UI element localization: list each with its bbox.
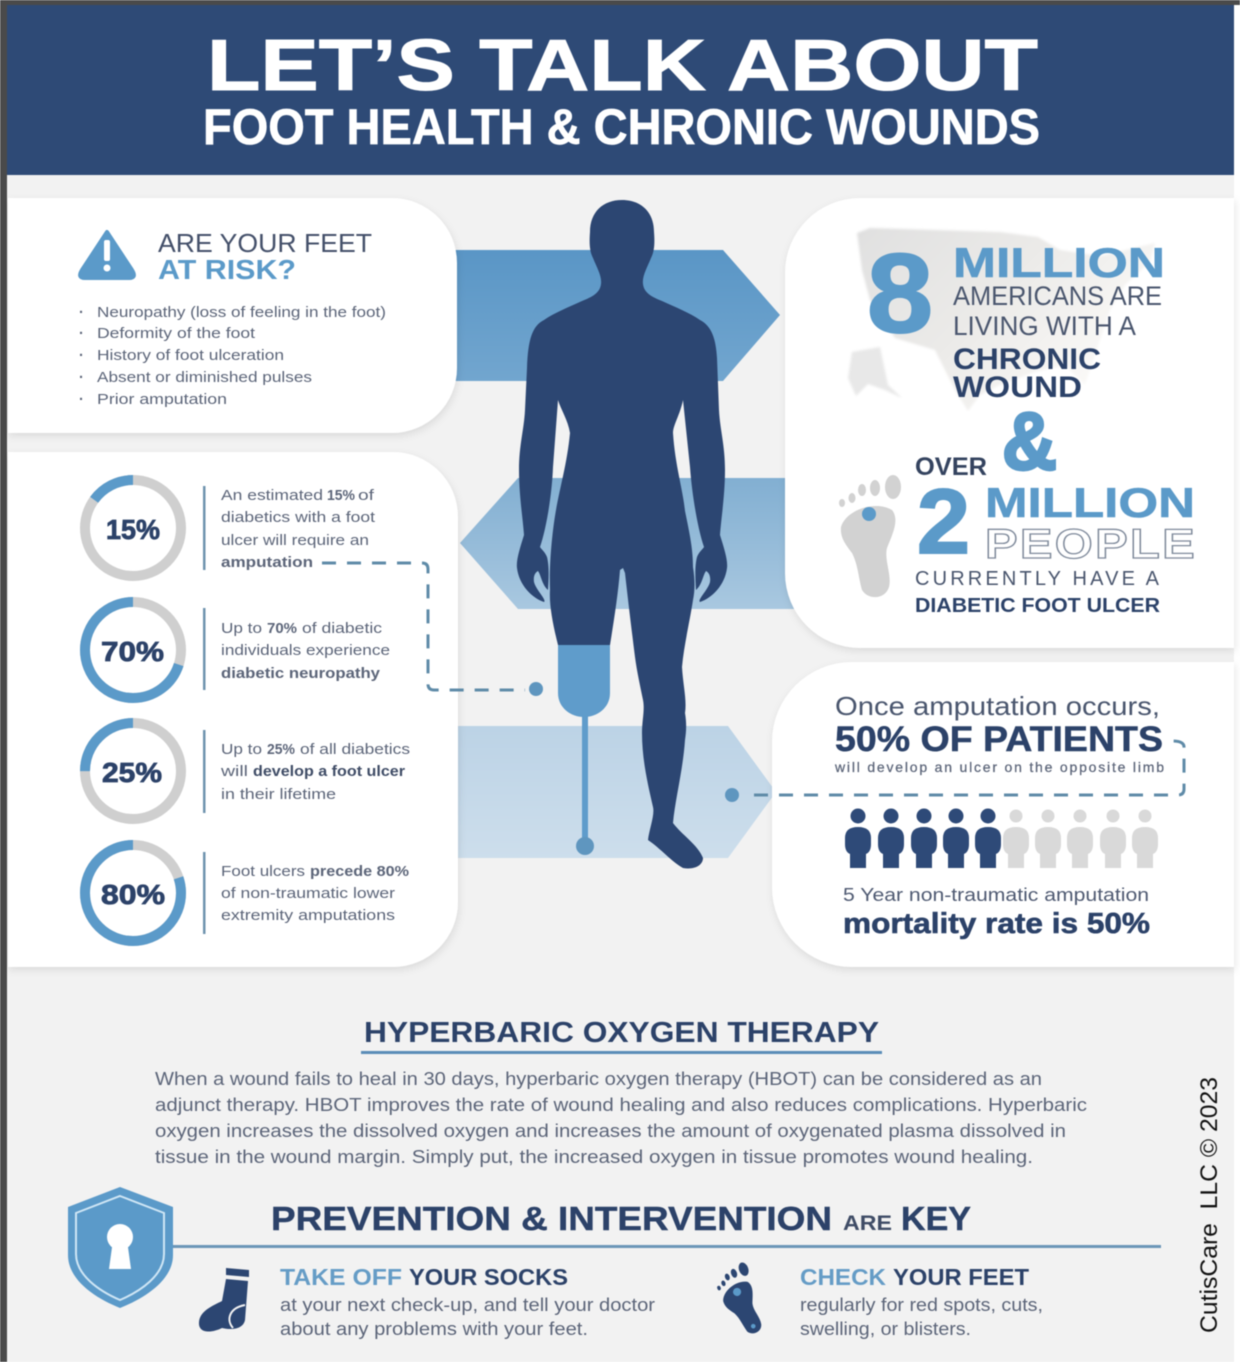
risk factor list: · (79, 326, 84, 342)
text: 15% amputation: 15% (327, 488, 355, 504)
text: 25% foot ulcer: of all diabetics (300, 742, 410, 758)
stat: 8 million: AMERICANS ARE (953, 281, 1162, 311)
connector: leg to opposite limb callout (725, 741, 1184, 802)
stat: 8 million (867, 231, 1165, 404)
text: 15% amputation: An estimated (221, 488, 323, 504)
text: once amputation occurs: will develop an ulcer on the opposite limb (834, 759, 1164, 775)
stat: over 2 million people: PEOPLE (985, 520, 1197, 567)
text: 25% foot ulcer (203, 730, 410, 813)
tip: check your feet: regularly for red spots, cuts, (800, 1295, 1043, 1315)
text: once amputation occurs: Once amputation occurs, (835, 691, 1160, 721)
text: 15% amputation (203, 486, 375, 571)
risk factor list: Neuropathy (loss of feeling in the foot) (97, 305, 386, 321)
icon: gray foot with wound (839, 475, 901, 597)
risk factor list: History of foot ulceration (97, 348, 284, 364)
icon: sock (199, 1268, 249, 1332)
paragraph: tissue in the wound margin. Simply put, the increased oxygen in tissue promotes wound healing. (155, 1147, 1033, 1167)
icon: shield with keyhole (68, 1187, 173, 1308)
text: mortality rate (843, 885, 1150, 940)
subtitle: FOOT HEALTH & CHRONIC WOUNDS (203, 99, 1040, 155)
heading: PREVENTION & INTERVENTION (271, 1200, 832, 1237)
panel: are your feet at risk (8, 198, 457, 433)
risk factor list: · (79, 348, 84, 364)
text: 15% amputation: amputation (221, 555, 313, 571)
text: 70% neuropathy: 70% (267, 621, 297, 637)
risk factor list: Deformity of the foot (97, 326, 255, 342)
stat: over 2 million people: 2 (917, 471, 970, 573)
title: LET’S TALK ABOUT (207, 26, 1038, 106)
text: 80% amputations (203, 852, 409, 934)
heading: at risk: AT RISK? (158, 254, 296, 285)
heading: KEY (901, 1200, 971, 1237)
tip: take off your socks: YOUR SOCKS (409, 1264, 568, 1290)
stat: 8 million: 8 (867, 231, 933, 356)
text: 70% neuropathy: individuals experience (221, 643, 390, 659)
risk factor list: · (79, 305, 84, 321)
text: 70% neuropathy: of diabetic (302, 621, 382, 637)
ring: 70% (85, 602, 181, 698)
icon: warning triangle (80, 232, 134, 278)
tip: check your feet: CHECK (800, 1264, 886, 1290)
paragraph (155, 1069, 1087, 1167)
map of the United States (848, 228, 1155, 411)
prosthetic rod and foot dot (582, 715, 588, 846)
paragraph: oxygen increases the dissolved oxygen and increases the amount of oxygenated plasma dissolved in (155, 1121, 1066, 1141)
ampersand: & (1002, 396, 1057, 487)
stat: over 2 million people: OVER (915, 453, 987, 481)
ring: 80%: 80% (101, 879, 165, 910)
text: 25% foot ulcer: develop a foot ulcer (253, 764, 405, 780)
tip: check your feet: YOUR FEET (893, 1264, 1029, 1290)
section: prevention and intervention (68, 1187, 1161, 1340)
text: 70% neuropathy: diabetic neuropathy (221, 666, 380, 682)
copyright note: CutisCare LLC © 2023 (1196, 1077, 1223, 1333)
stat: 8 million: MILLION (953, 239, 1165, 286)
text: 15% amputation: of (358, 488, 375, 504)
stat: over 2 million people: DIABETIC FOOT ULCER (915, 595, 1161, 617)
icon: navy foot (712, 1261, 770, 1340)
panel: amputation outcomes (772, 662, 1234, 967)
heading: HYPERBARIC OXYGEN THERAPY (364, 1017, 879, 1049)
text: mortality rate: mortality rate is 50% (843, 908, 1150, 940)
text: once amputation occurs (834, 691, 1164, 775)
tip: check your feet: swelling, or blisters. (800, 1319, 971, 1339)
stat: over 2 million people: MILLION (985, 479, 1195, 526)
text: 25% foot ulcer: in their lifetime (221, 787, 336, 803)
ring: 25%: 25% (102, 757, 162, 788)
ring: 15%: 15% (106, 514, 160, 545)
connector: amputation to prosthetic (322, 563, 543, 696)
text: 15% amputation: ulcer will require an (221, 533, 369, 549)
heading: ARE (843, 1212, 892, 1235)
text: 70% neuropathy: Up to (221, 621, 262, 637)
paragraph: When a wound fails to heal in 30 days, hyperbaric oxygen therapy (HBOT) can be considered as an (155, 1069, 1042, 1089)
ring: 25% (85, 723, 181, 819)
text: 15% amputation: diabetics with a foot (221, 510, 375, 526)
ring: 80% (85, 845, 181, 941)
body silhouette (517, 200, 727, 868)
panel: chronic wound numbers (785, 198, 1234, 648)
stat: 8 million: CHRONIC (953, 343, 1101, 376)
heading: are your feet: ARE YOUR FEET (158, 228, 372, 258)
tip: take off your socks: TAKE OFF (280, 1264, 402, 1290)
risk factor list (79, 305, 386, 408)
arrow: top right-pointing band (440, 250, 780, 381)
tip: check your feet (800, 1264, 1043, 1339)
risk factor list: · (79, 370, 84, 386)
risk factor list: Prior amputation (97, 392, 227, 408)
text: mortality rate: 5 Year non-traumatic amputation (843, 885, 1149, 905)
panel: diabetic statistics (8, 452, 458, 967)
text: once amputation occurs: 50% OF PATIENTS (835, 720, 1163, 759)
stat: 8 million: LIVING WITH A (953, 311, 1136, 341)
text: 80% amputations: extremity amputations (221, 908, 395, 924)
prosthetic socket (558, 645, 610, 717)
rule (170, 1245, 1161, 1248)
section: hyperbaric oxygen therapy (155, 1017, 1087, 1167)
header banner (7, 5, 1234, 175)
stat: over 2 million people (915, 453, 1197, 617)
text: 25% foot ulcer: Up to (221, 742, 262, 758)
text: 25% foot ulcer: will (220, 764, 248, 780)
paragraph: adjunct therapy. HBOT improves the rate of wound healing and also reduces complications. Hyperbaric (155, 1095, 1087, 1115)
risk factor list: · (79, 392, 84, 408)
tip: take off your socks: at your next check-up, and tell your doctor (280, 1295, 655, 1315)
arrow: bottom right-pointing band (440, 726, 776, 858)
ring: 70%: 70% (101, 636, 164, 667)
text: 25% foot ulcer: 25% (267, 742, 295, 758)
text: 80% amputations: Foot ulcers (221, 864, 305, 880)
arrow: middle left-pointing band (460, 478, 800, 609)
text: 80% amputations: of non-traumatic lower (221, 886, 395, 902)
human figure with prosthetic leg (517, 200, 727, 868)
stat: 8 million: WOUND (953, 371, 1082, 404)
pictogram: five of ten people (845, 808, 1158, 868)
ring: 15% (85, 480, 181, 576)
tip: take off your socks: about any problems with your feet. (280, 1319, 588, 1339)
risk factor list: Absent or diminished pulses (97, 370, 312, 386)
stat: over 2 million people: CURRENTLY HAVE A (915, 568, 1160, 590)
text: 80% amputations: precede 80% (310, 864, 409, 880)
text: 70% neuropathy (203, 608, 390, 690)
tip: take off your socks (280, 1264, 655, 1339)
